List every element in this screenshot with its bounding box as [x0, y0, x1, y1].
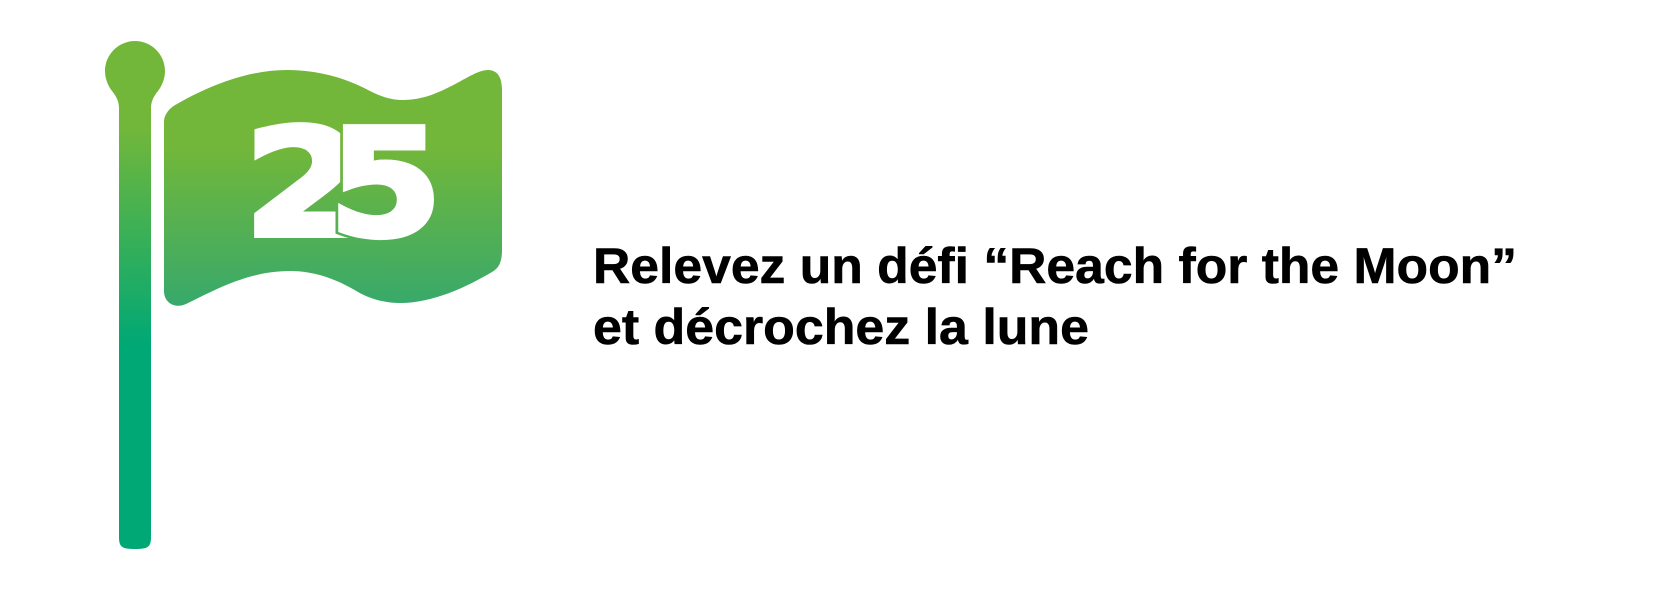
icon: waving flag [164, 70, 502, 306]
icon: flag pole with ball top [105, 41, 165, 549]
number 25 [244, 98, 442, 270]
heading: et décrochez la lune [593, 299, 1089, 355]
number 25: 2 [244, 98, 364, 270]
number 25: 5 [329, 98, 442, 270]
number 25: 5 [329, 98, 442, 270]
heading [593, 238, 1517, 355]
heading: Relevez un défi “Reach for the Moon” [593, 238, 1517, 294]
